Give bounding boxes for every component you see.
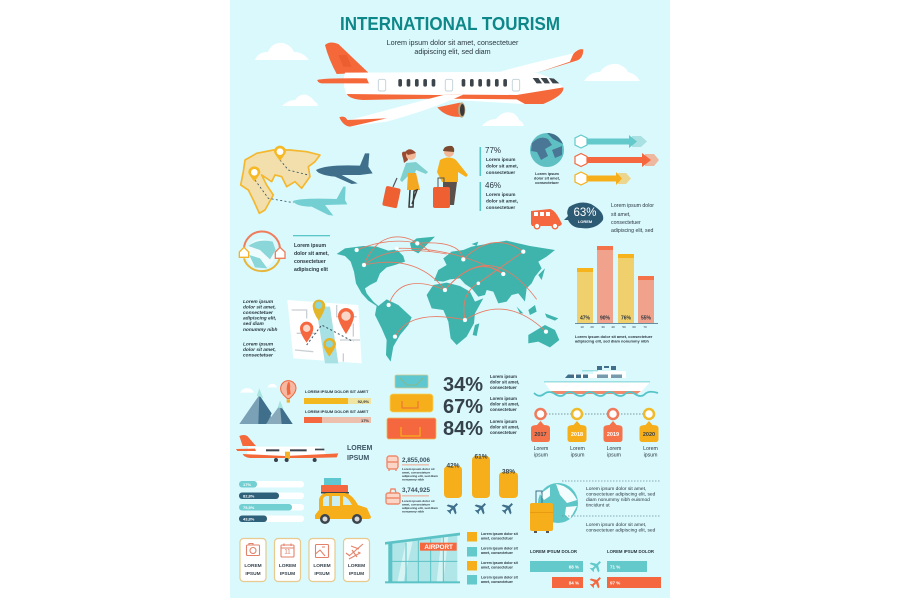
text block: globe notes: consectetuer adipiscing elit, sed: [586, 492, 656, 498]
icon cards: 11: [284, 550, 291, 556]
airport legend: amet, consectetuer: [481, 566, 514, 570]
timeline: Lorem: [570, 446, 585, 452]
icon: circular globe exchange: [239, 231, 285, 271]
bar chart: 20: [590, 325, 594, 329]
illustration: car with luggage: [315, 478, 371, 524]
comparison bars: 68 %: [569, 564, 579, 570]
background panel: [230, 0, 670, 598]
timeline: 2020: [643, 432, 655, 438]
horizontal percentage bars: [239, 481, 304, 522]
progress bars: lorem ipsum dolor: LOREM IPSUM DOLOR SIT AMET: [305, 389, 369, 394]
text block beside callout: adipiscing elit, sed: [611, 228, 654, 234]
text block: italic notes: [243, 299, 277, 358]
statistics: 77% and 46%: 77%: [485, 146, 501, 155]
text block: italic notes: dolor sit amet,: [243, 304, 276, 310]
airport legend: Lorem ipsum dolor sit: [481, 561, 519, 565]
airport legend: amet, consectetuer: [481, 551, 514, 555]
bar chart: 10: [580, 325, 584, 329]
text block: globe notes: consectetuer adipiscing elit, sed: [586, 528, 656, 534]
text block beside callout: Lorem ipsum dolor: [611, 203, 654, 209]
progress bars: lorem ipsum dolor: [304, 389, 371, 423]
statistics: 34% 67% 84%: Lorem ipsum: [490, 396, 517, 401]
statistic: 3,744,925: nonummy nibh: [402, 510, 424, 514]
cylinder chart: 61%: [474, 454, 488, 460]
statistics: 34% 67% 84%: Lorem ipsum: [490, 374, 517, 379]
horizontal percentage bars: 82,8%: [243, 494, 255, 498]
text block beside callout: consectetuer: [611, 220, 641, 226]
icon cards: IPSUM: [314, 571, 330, 577]
text block: italic notes: sed diam: [243, 321, 265, 327]
progress bars: lorem ipsum dolor: 17%: [361, 418, 369, 423]
comparison bars: 84 %: [569, 580, 579, 586]
comparison bars: 71 %: [610, 564, 620, 570]
text block: lorem ipsum with rule: adipiscing elit: [294, 267, 328, 273]
comparison bars: LOREM IPSUM DOLOR: [530, 549, 578, 554]
text block: globe notes: tincidunt ut: [586, 502, 610, 508]
statistic: 3,744,925: Lorem ipsum dolor sit: [402, 499, 434, 503]
subtitle: [387, 38, 519, 56]
icon: bus: [387, 456, 398, 471]
text block: italic notes: dolor sit amet,: [243, 347, 276, 353]
illustration: mountains and balloon: [239, 381, 296, 424]
airport legend: Lorem ipsum dolor sit: [481, 576, 519, 580]
timeline: ipsum: [644, 452, 657, 458]
timeline: ipsum: [571, 452, 584, 458]
airport legend: Lorem ipsum dolor sit: [481, 532, 519, 536]
callout: 63%: [564, 203, 603, 228]
statistics: 77% and 46%: consectetuer: [486, 205, 515, 210]
statistic: 3,744,925: [402, 487, 438, 514]
text block: lorem ipsum with rule: dolor sit amet,: [294, 251, 329, 257]
text block: italic notes: Lorem ipsum: [243, 299, 274, 305]
text block: globe notes: [562, 481, 661, 534]
horizontal percentage bars: 75,5%: [243, 505, 255, 510]
icon: van: [531, 209, 562, 229]
text block: italic notes: consectetuer: [243, 352, 274, 358]
icon cards: IPSUM: [349, 571, 364, 577]
icon cards: IPSUM: [245, 571, 261, 577]
clouds: [255, 43, 640, 126]
airport legend: Lorem ipsum dolor sit: [481, 546, 519, 550]
illustration: main airplane: [317, 43, 583, 127]
bar chart: 47%: [580, 316, 591, 322]
title: INTERNATIONAL TOURISM: [340, 13, 560, 34]
icon cards: [240, 538, 370, 582]
progress bars: lorem ipsum dolor: 92,9%: [358, 399, 369, 404]
icon: luggage: [386, 489, 400, 504]
statistics: 34% 67% 84%: consectetuer: [490, 385, 517, 390]
statistic: 3,744,925: amet, consectetuer: [402, 502, 431, 506]
statistics: 77% and 46%: consectetuer: [486, 170, 515, 175]
chart caption: adipiscing elit, sed diam nonummy nibh: [575, 338, 650, 344]
statistic: 2,855,006: nonummy nibh: [402, 478, 424, 482]
bar chart: 40: [611, 325, 615, 329]
airport legend: [467, 532, 519, 584]
subtitle: adipiscing elit, sed diam: [414, 47, 491, 56]
airport legend: amet, consectetuer: [481, 580, 514, 584]
comparison bars: LOREM IPSUM DOLOR: [607, 549, 655, 554]
text block: lorem ipsum with rule: Lorem ipsum: [294, 243, 326, 249]
globe caption: consectetuer: [535, 181, 559, 185]
statistics: 34% 67% 84%: Lorem ipsum: [490, 419, 517, 424]
comparison bars: [530, 549, 661, 590]
statistics: 34% 67% 84%: dolor sit amet,: [490, 380, 519, 384]
horizontal percentage bars: 43,8%: [243, 516, 255, 522]
subtitle: Lorem ipsum dolor sit amet, consectetuer: [387, 38, 519, 47]
statistic: 2,855,006: 2,855,006: [402, 457, 431, 464]
globe caption: Lorem ipsum: [535, 172, 560, 176]
statistics: 77% and 46%: [480, 146, 518, 211]
text block: globe notes: diam nonummy nibh euismod: [586, 497, 650, 503]
callout: 63%: LOREM: [578, 219, 593, 224]
label: lorem ipsum: LOREM: [347, 445, 372, 452]
timeline: 2018: [571, 432, 583, 438]
chart caption: [575, 334, 653, 344]
statistic: 2,855,006: adipiscing elit, sed diam: [402, 474, 438, 478]
text block: globe notes: Lorem ipsum dolor sit amet,: [586, 486, 646, 492]
text block: globe notes: Lorem ipsum dolor sit amet,: [586, 522, 646, 528]
bar chart: 90%: [600, 316, 611, 322]
statistics: 77% and 46%: Lorem ipsum: [486, 157, 515, 162]
icon: globe: [530, 133, 564, 167]
horizontal percentage bars: 17%: [243, 482, 251, 487]
statistics: 34% 67% 84%: 67%: [443, 396, 483, 418]
statistic: 3,744,925: adipiscing elit, sed diam: [402, 506, 438, 510]
statistic: 2,855,006: Lorem ipsum dolor sit: [402, 467, 434, 471]
label: lorem ipsum: [347, 445, 372, 462]
text block: italic notes: nonummy nibh: [243, 327, 277, 333]
illustration: cruise ship: [534, 366, 658, 396]
illustration: airport building: AIRPORT: [424, 544, 453, 551]
statistics: 77% and 46%: dolor sit amet,: [486, 164, 518, 168]
text block: italic notes: Lorem ipsum: [243, 342, 274, 348]
world map with routes: [337, 237, 559, 362]
statistic: 3,744,925: 3,744,925: [402, 487, 431, 494]
statistic: 2,855,006: [402, 457, 438, 482]
statistics: 77% and 46%: dolor sit amet,: [486, 198, 518, 204]
statistics: 34% 67% 84%: dolor sit amet,: [490, 424, 519, 430]
comparison bars: 97 %: [610, 580, 620, 586]
timeline: 2019: [607, 432, 619, 438]
statistics: 34% 67% 84%: 84%: [443, 418, 483, 440]
statistics: 34% 67% 84%: dolor sit amet,: [490, 402, 519, 406]
globe caption: [534, 172, 560, 185]
timeline: ipsum: [534, 452, 548, 458]
chart caption: Lorem ipsum dolor sit amet, consectetuer: [575, 334, 653, 339]
globe caption: dolor sit amet,: [534, 176, 560, 180]
bar chart: 76%: [621, 316, 632, 322]
timeline: Lorem: [607, 446, 621, 452]
illustration: globe with suitcase: [530, 483, 578, 533]
bar chart: 70: [643, 325, 647, 329]
statistics: 34% 67% 84%: consectetuer: [490, 430, 517, 435]
cylinder chart: 42%: [446, 462, 460, 470]
statistics: 34% 67% 84%: 34%: [443, 374, 483, 396]
cylinder chart: 38%: [502, 468, 515, 476]
timeline: Lorem: [643, 446, 658, 452]
text block: italic notes: adipiscing elit,: [243, 316, 276, 322]
icon cards: LOREM: [348, 563, 365, 569]
illustration: airport building: [385, 533, 460, 583]
illustration: suitcases: [387, 375, 436, 439]
text block: lorem ipsum with rule: [293, 235, 330, 273]
timeline: ipsum: [607, 452, 621, 458]
illustration: travellers with suitcases: [382, 146, 468, 208]
icon cards: LOREM: [244, 563, 262, 569]
statistics: 77% and 46%: Lorem ipsum: [486, 192, 515, 197]
bar chart: 60: [632, 325, 636, 329]
text block: lorem ipsum with rule: consectetuer: [294, 259, 326, 265]
statistics: 34% 67% 84%: consectetuer: [490, 407, 517, 412]
statistics: 77% and 46%: 46%: [485, 181, 501, 190]
timeline: Lorem: [534, 446, 548, 452]
text block beside callout: [611, 203, 654, 234]
statistics: 34% 67% 84%: [443, 374, 519, 440]
icon cards: LOREM: [313, 563, 331, 569]
text block: italic notes: consectetuer: [243, 310, 274, 316]
airport legend: amet, consectetuer: [481, 536, 514, 540]
callout: 63%: 63%: [573, 207, 597, 219]
cylinder chart: [444, 454, 518, 516]
icon cards: LOREM: [279, 563, 296, 569]
statistic: 2,855,006: amet, consectetuer: [402, 470, 431, 474]
illustration: map of Europe and Africa with routes: [241, 146, 373, 216]
illustration: airplane on ground: [236, 435, 338, 462]
bar chart: [575, 246, 658, 329]
timeline: [531, 409, 658, 458]
text block beside callout: sit amet,: [611, 212, 631, 218]
timeline: 2017: [534, 432, 547, 438]
bar chart: 55%: [641, 316, 652, 322]
illustration: city map with pins: [287, 300, 362, 363]
arrows: [575, 135, 659, 185]
label: lorem ipsum: IPSUM: [347, 455, 369, 462]
progress bars: lorem ipsum dolor: LOREM IPSUM DOLOR SIT AMET: [305, 409, 369, 414]
icon cards: IPSUM: [280, 571, 295, 577]
bar chart: 50: [622, 325, 626, 329]
bar chart: 30: [601, 325, 605, 329]
